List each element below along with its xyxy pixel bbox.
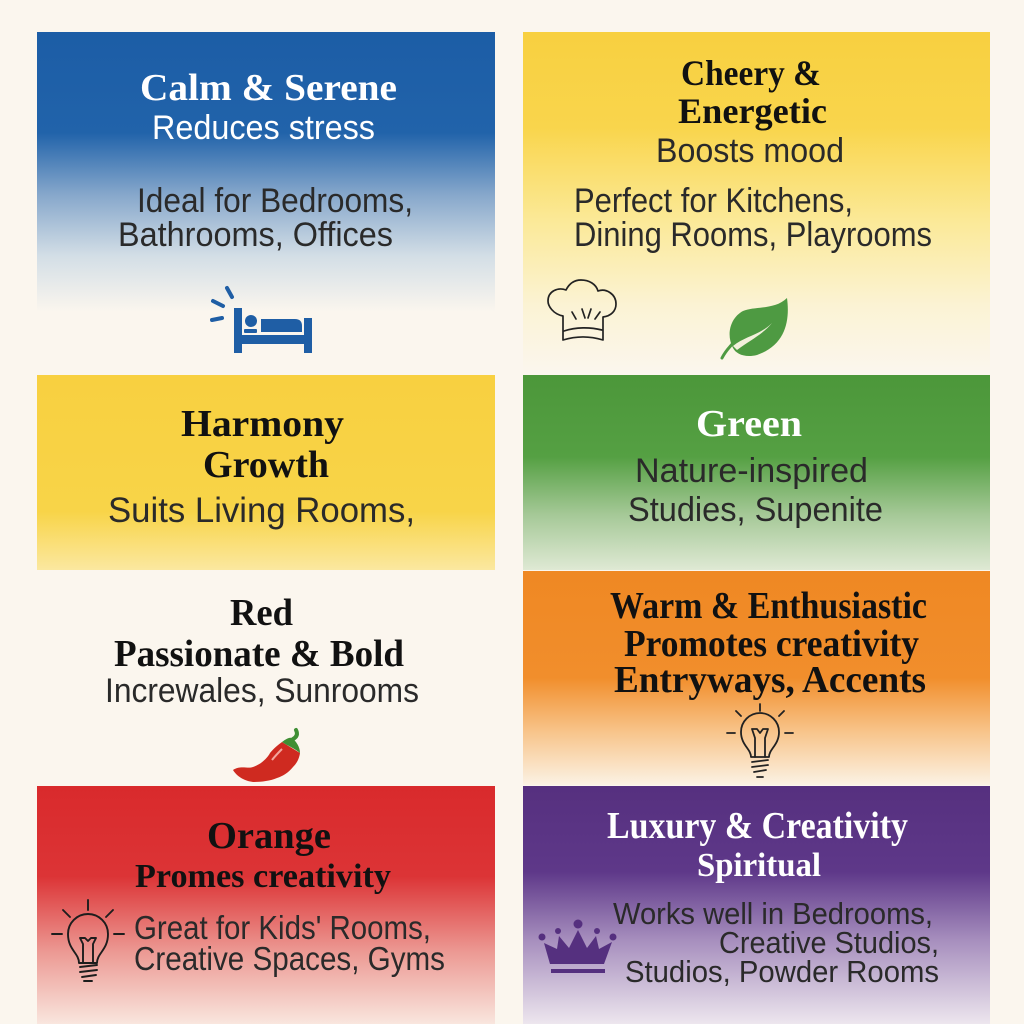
heading: Calm & Serene: Calm & Serene — [140, 67, 397, 109]
text: room list: Ideal for Bedrooms, — [137, 182, 413, 220]
text: Promes creativity: Promes creativity — [135, 858, 391, 895]
text: room list — [613, 896, 939, 989]
text: room list: Creative Spaces, Gyms — [134, 940, 445, 977]
heading: Harmony Growth: Harmony — [181, 403, 344, 445]
icon: chili pepper — [233, 730, 300, 782]
heading: Red Passionate & Bold — [114, 592, 404, 675]
heading: Orange: Orange — [207, 815, 331, 857]
text: room list: Works well in Bedrooms, — [613, 896, 933, 931]
icon: chef hat — [548, 280, 616, 340]
text: room list: Creative Studios, — [719, 925, 939, 960]
text: description: Studies, Supenite — [628, 491, 883, 529]
text: description — [628, 452, 883, 529]
text: room list: Great for Kids' Rooms, — [134, 909, 431, 946]
panel: warm and enthusiastic — [523, 571, 990, 785]
text: room list: Studios, Powder Rooms — [625, 954, 939, 989]
heading: Warm & Enthusiastic — [610, 585, 927, 701]
text: room list: Dining Rooms, Playrooms — [574, 216, 932, 254]
icon: crown — [538, 920, 616, 973]
heading: Cheery & Energetic: Cheery & — [681, 53, 821, 93]
panel: green — [523, 375, 990, 570]
heading: Harmony Growth — [181, 403, 344, 486]
text: Spiritual: Spiritual — [697, 847, 821, 884]
heading: Red Passionate & Bold: Passionate & Bold — [114, 633, 404, 675]
text: Suits Living Rooms: Suits Living Rooms, — [108, 491, 415, 530]
panel: red — [105, 592, 419, 782]
heading: Harmony Growth: Growth — [203, 444, 329, 486]
panel: cheery and energetic — [523, 32, 990, 374]
heading: Warm & Enthusiastic: Promotes creativity — [624, 623, 919, 665]
icon: bed — [212, 288, 312, 353]
heading: Red Passionate & Bold: Red — [230, 592, 293, 634]
text: room list — [134, 909, 445, 977]
heading: Green: Green — [696, 403, 802, 445]
icon: leaf — [722, 298, 788, 358]
heading: Cheery & Energetic: Energetic — [678, 91, 827, 131]
panel: harmony growth — [37, 375, 495, 570]
panel: luxury and creativity — [523, 786, 990, 1024]
heading: Cheery & Energetic — [678, 53, 827, 131]
panel: orange — [37, 786, 495, 1024]
text: room list — [118, 182, 413, 254]
panel: calm and serene — [37, 32, 495, 353]
heading: Luxury & Creativity: Luxury & Creativity — [607, 805, 908, 847]
text: description: Nature-inspired — [635, 452, 868, 490]
text: room list — [574, 182, 932, 254]
icon: light bulb — [52, 900, 124, 981]
text: room list: Bathrooms, Offices — [118, 216, 393, 254]
text: room list: Perfect for Kitchens, — [574, 182, 853, 220]
icon: light bulb — [727, 704, 793, 777]
text: Boosts mood: Boosts mood — [656, 132, 844, 170]
text: Reduces stress: Reduces stress — [152, 109, 375, 147]
heading: Warm & Enthusiastic: Entryways, Accents — [614, 659, 926, 701]
heading: Warm & Enthusiastic: Warm & Enthusiastic — [610, 585, 927, 627]
text: Increwales, Sunrooms: Increwales, Sunrooms — [105, 672, 419, 710]
